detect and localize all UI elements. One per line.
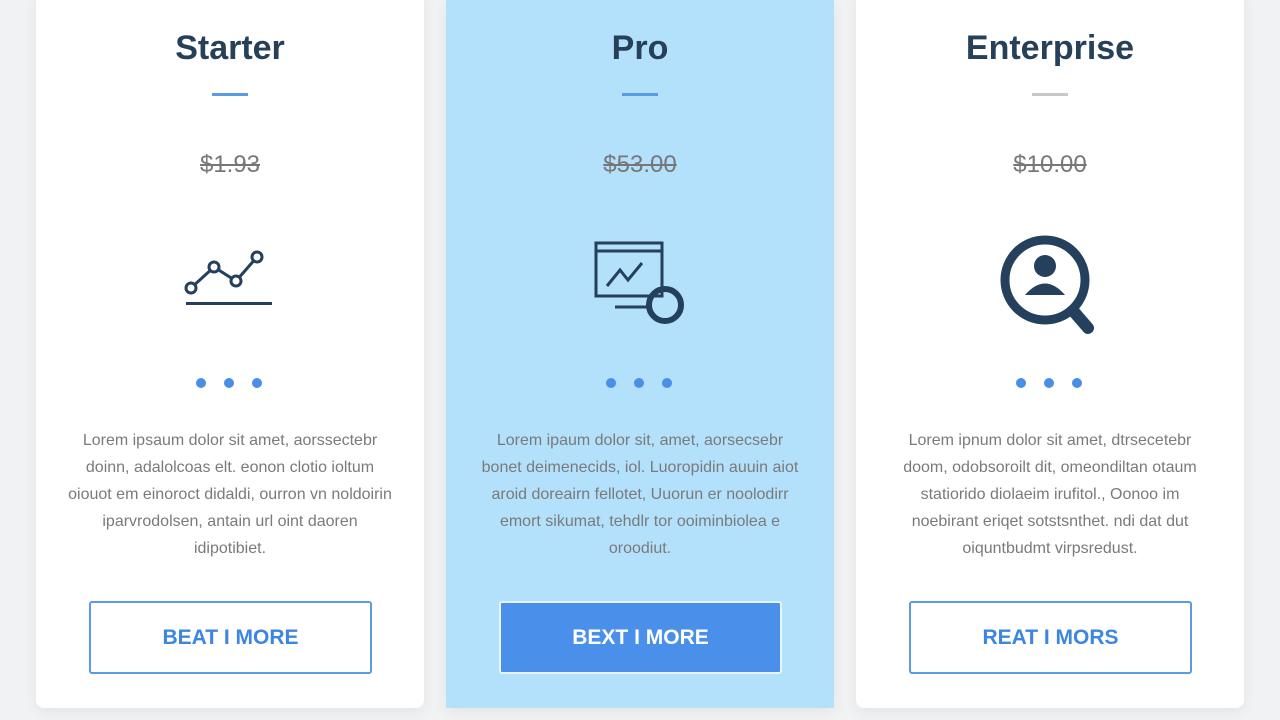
button: REAT I MORS [982,626,1119,649]
button [909,601,1192,674]
text block: Lorem ipsaum dolor sit amet, aorssectebr doinn, adalolcoas elt. eonon clotio ioltum oiouot em einoroct didaldi, ourron vn noldoirin iparvrodolsen, antain url oint daoren idipotibiet. [68,432,392,557]
price: $10.00 [1013,151,1087,178]
button [89,601,372,674]
icon: line chart [184,250,272,305]
heading: Starter: Starter [175,29,285,67]
button [499,601,782,674]
heading: Pro: Pro [612,29,668,67]
text block: Lorem ipnum dolor sit amet, dtrsecetebr doom, odobsoroilt dit, omeondiltan otaum statiorido diolaeim irufitol., Oonoo im noebirant eriqet sotstsnthet. ndi dat dut oiquntbudmt virpsredust. [903,432,1197,557]
panel: Starter [36,0,424,708]
icon: search person [1000,236,1094,334]
dots [606,378,672,388]
heading: Enterprise: Enterprise [966,29,1134,67]
button: BEAT I MORE [162,626,299,649]
panel: Enterprise [856,0,1244,708]
dots [196,378,262,388]
price: $53.00 [603,151,677,178]
button: BEXT I MORE [572,626,709,649]
dots [1016,378,1082,388]
text block: Lorem ipaum dolor sit, amet, aorsecsebr bonet deimenecids, iol. Luoropidin auuin aiot aroid doreairn fellotet, Uuorun er noolodirr emort sikumat, tehdlr tor ooiminbiolea e oroodiut. [482,432,798,557]
icon: monitor with magnifier [594,242,684,324]
price: $1.93 [200,151,260,178]
panel: Pro [446,0,834,708]
